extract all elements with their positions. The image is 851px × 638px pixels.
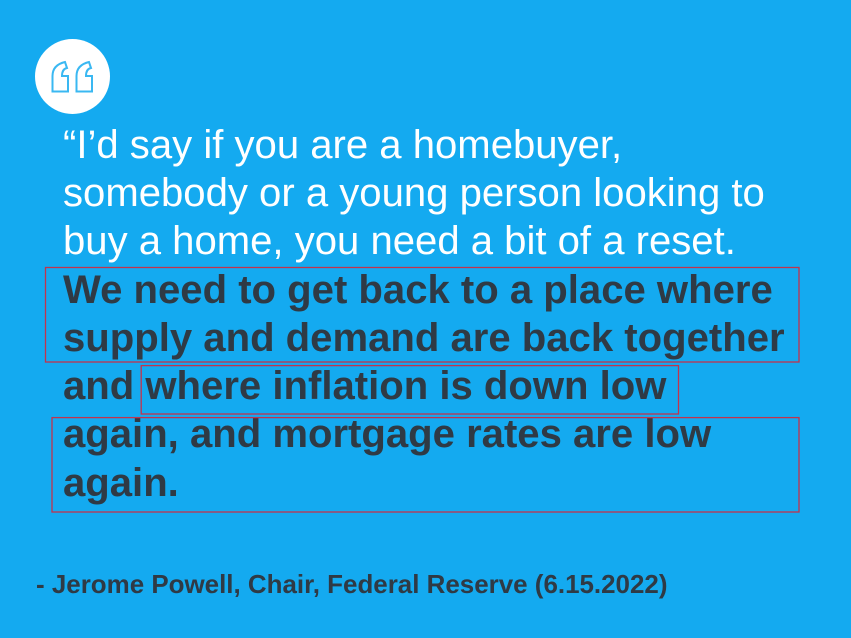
attribution: - Jerome Powell, Chair, Federal Reserve (6.15.2022)	[36, 571, 667, 599]
quote text: supply and demand are back together	[63, 316, 785, 360]
highlight box: inflation	[140, 364, 680, 415]
quote text: We need to get back to a place where	[63, 268, 773, 312]
highlight box: mortgage rates	[51, 416, 800, 513]
quote text: again, and mortgage rates are low	[63, 412, 711, 456]
quote text: “I’d say if you are a homebuyer,	[63, 123, 622, 167]
quote text: buy a home, you need a bit of a reset.	[63, 219, 736, 263]
icon: quotation mark badge	[35, 39, 110, 114]
quote text: somebody or a young person looking to	[63, 171, 765, 215]
quote text: and where inflation is down low	[63, 364, 666, 408]
highlight box: supply and demand	[44, 266, 800, 363]
quote text	[63, 123, 785, 505]
quote text: again.	[63, 461, 179, 505]
